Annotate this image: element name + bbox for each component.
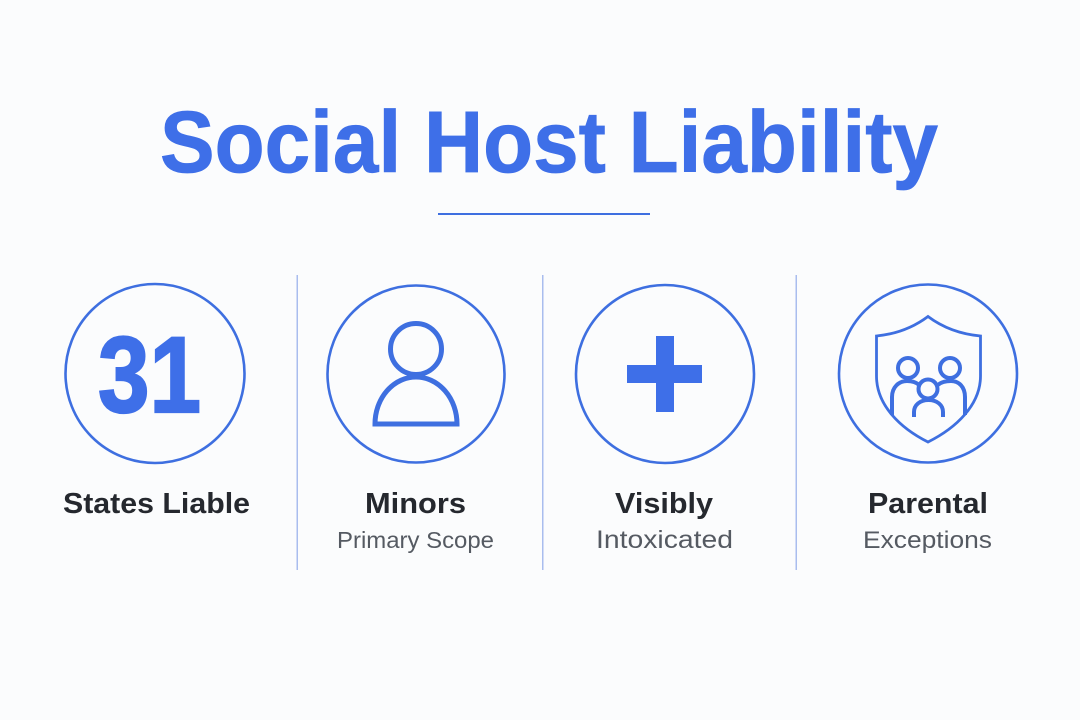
sublabel: primary scope: Primary Scope: [337, 527, 494, 553]
icon: circle with number 31: [66, 284, 244, 463]
panel: parental exceptions: [839, 284, 1017, 554]
icon: family shield: [839, 284, 1017, 462]
label: minors: Minors: [365, 488, 466, 520]
title: Social Host Liability: [160, 94, 938, 191]
panel: minors: [328, 286, 504, 553]
sublabel: exceptions: Exceptions: [863, 527, 992, 554]
icon: circle with number 31: 31: [98, 314, 201, 435]
sublabel: intoxicated: Intoxicated: [596, 526, 733, 554]
panel: states liable: [63, 284, 250, 520]
panel: visibly intoxicated: [576, 285, 754, 554]
label: states liable: States Liable: [63, 488, 250, 520]
icon: person: [328, 286, 504, 462]
icon: plus: [576, 285, 754, 463]
label: parental: Parental: [868, 488, 988, 520]
label: visibly: Visibly: [615, 488, 713, 520]
